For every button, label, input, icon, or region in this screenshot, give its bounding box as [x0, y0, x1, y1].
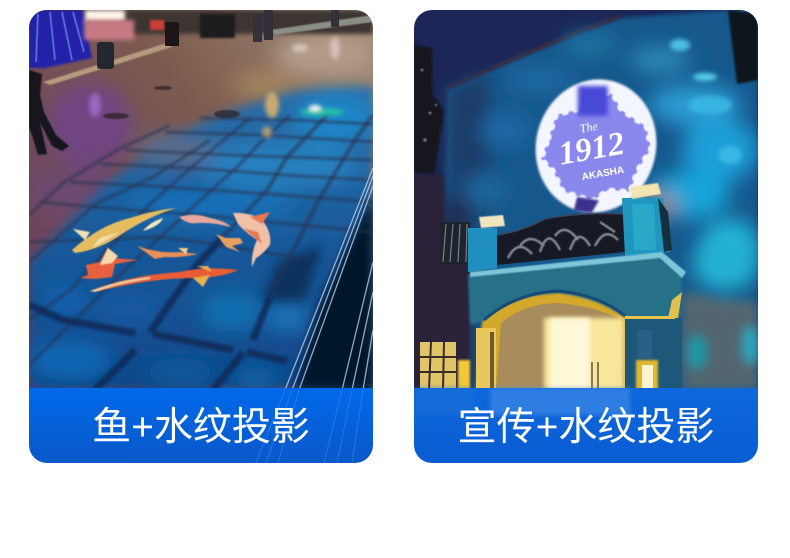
entrance arch — [476, 291, 628, 390]
pillar lamps — [479, 215, 505, 228]
right column with lamp — [625, 292, 682, 390]
decorative top scene: tree, shops, people — [29, 10, 373, 85]
pillars — [468, 228, 497, 272]
lower left wall — [414, 174, 446, 234]
panel: promotional and water ripple projection — [414, 10, 758, 463]
balcony railing — [497, 214, 625, 265]
blue water area — [29, 86, 373, 390]
left balcony grille — [440, 222, 470, 264]
lower facade — [468, 255, 682, 325]
lower right wall — [682, 292, 758, 390]
tree — [414, 45, 444, 175]
logo wordmark: 1912 — [556, 126, 627, 173]
logo wordmark: The — [579, 119, 599, 136]
tile grout lines — [29, 112, 373, 365]
koi fish — [72, 208, 270, 292]
logo wordmark: AKASHA — [581, 165, 625, 183]
photo: building with logo projection — [414, 10, 758, 390]
photo: plaza floor with koi projection — [27, 10, 377, 390]
panel: fish and water ripple projection — [27, 10, 377, 463]
caption banner — [414, 388, 758, 463]
projected light streaks — [285, 168, 373, 390]
caption text: 鱼+水纹投影 — [92, 406, 310, 449]
thick foreground grout — [29, 238, 287, 390]
floor reflections — [89, 37, 344, 138]
window and lamp — [420, 342, 470, 390]
caption banner — [29, 388, 373, 463]
caption text: 宣传+水纹投影 — [458, 406, 714, 449]
dark block top right — [728, 10, 758, 84]
dark right corner — [296, 195, 373, 390]
projected logo — [534, 78, 658, 214]
person at left — [29, 70, 69, 155]
wall — [440, 10, 758, 390]
